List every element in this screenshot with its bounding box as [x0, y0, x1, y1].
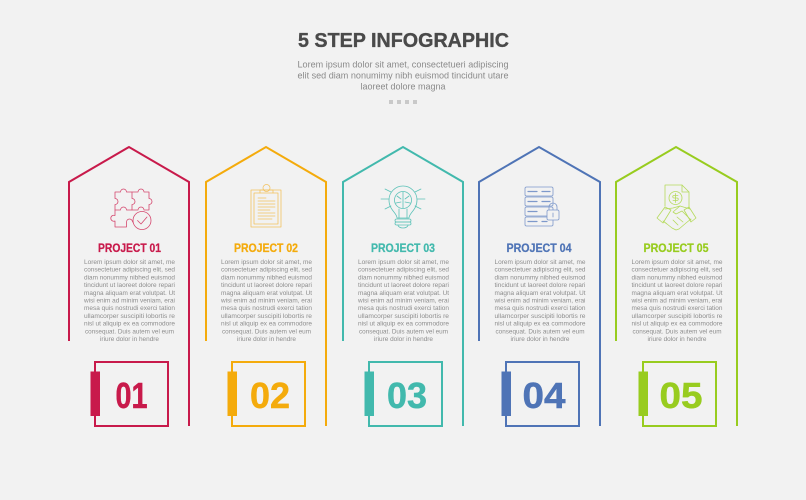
- body text: iriure dolor in hendre: [510, 336, 570, 343]
- body text: tincidunt ut laoreet dolore repari: [494, 282, 586, 289]
- panel: project 03: [343, 147, 463, 426]
- subtitle text: elit sed diam nonumimy nibh euismod tincidunt utare: [298, 70, 508, 80]
- body text: iriure dolor in hendre: [648, 336, 707, 343]
- icon: puzzle with check: [111, 189, 152, 230]
- body text: magna aliquam erat volutpat. Ut: [632, 290, 723, 297]
- body text: [494, 259, 586, 343]
- body text: wisi enim ad minim veniam, erai: [220, 298, 313, 304]
- outline: [343, 147, 463, 426]
- body text: diam nonummy nibhed euismod: [632, 274, 723, 281]
- number box: 04: [522, 375, 566, 416]
- body text: wisi enim ad minim veniam, erai: [357, 298, 450, 304]
- heading: PROJECT 02: [234, 243, 298, 255]
- icon: light bulb with brain: [381, 186, 425, 228]
- heading: PROJECT 04: [506, 243, 572, 255]
- subtitle text: [298, 60, 508, 92]
- body text: magna aliquam erat volutpat. Ut: [494, 290, 586, 297]
- outline: [206, 147, 326, 426]
- body text: iriure dolor in hendre: [237, 336, 296, 343]
- number box: [502, 362, 579, 426]
- body text: consectetuer adipiscing elit, sed: [221, 267, 312, 274]
- body text: wisi enim ad minim veniam, erai: [631, 298, 723, 304]
- body text: iriure dolor in hendre: [374, 336, 433, 343]
- body text: magna aliquam erat volutpat. Ut: [358, 290, 449, 297]
- heading: PROJECT 03: [371, 243, 435, 255]
- number box: 05: [660, 375, 702, 416]
- body text: consectetuer adipiscing elit, sed: [632, 267, 723, 274]
- body text: Lorem ipsum dolor sit amet, me: [358, 259, 449, 266]
- body text: ullamcorper suscipiti lobortis re: [358, 313, 449, 320]
- body text: nisl ut aliquip ex ea commodore: [221, 321, 312, 328]
- body text: magna aliquam erat volutpat. Ut: [84, 290, 175, 297]
- body text: mesa quis nostrudi exerci tation: [494, 305, 586, 312]
- panel: project 05: [616, 147, 737, 426]
- outline: [616, 147, 737, 426]
- body text: [220, 259, 313, 343]
- body text: consequat. Duis autem vel eum: [85, 328, 174, 335]
- body text: nisl ut aliquip ex ea commodore: [494, 321, 586, 328]
- body text: diam nonummy nibhed euismod: [84, 274, 175, 281]
- body text: mesa quis nostrudi exerci tation: [632, 305, 723, 312]
- number box: 01: [116, 375, 148, 416]
- body text: wisi enim ad minim veniam, erai: [494, 298, 586, 304]
- body text: Lorem ipsum dolor sit amet, me: [632, 259, 723, 266]
- body text: diam nonummy nibhed euismod: [494, 274, 586, 281]
- body text: consequat. Duis autem vel eum: [222, 328, 311, 335]
- subtitle text: laoreet dolore magna: [360, 82, 446, 92]
- body text: consequat. Duis autem vel eum: [359, 328, 448, 335]
- outline: [479, 147, 600, 426]
- body text: consequat. Duis autem vel eum: [632, 328, 722, 335]
- body text: [357, 259, 450, 343]
- body text: mesa quis nostrudi exerci tation: [221, 305, 312, 312]
- body text: ullamcorper suscipiti lobortis re: [632, 313, 723, 320]
- body text: tincidunt ut laoreet dolore repari: [358, 282, 450, 289]
- body text: nisl ut aliquip ex ea commodore: [632, 321, 723, 328]
- body text: ullamcorper suscipiti lobortis re: [84, 313, 175, 320]
- body text: consectetuer adipiscing elit, sed: [358, 267, 449, 274]
- number box: 02: [250, 375, 290, 416]
- panel: project 04: [479, 147, 600, 426]
- body text: Lorem ipsum dolor sit amet, me: [84, 259, 175, 266]
- body text: Lorem ipsum dolor sit amet, me: [221, 259, 312, 266]
- outline: [69, 147, 189, 426]
- number box: 03: [387, 375, 427, 416]
- body text: tincidunt ut laoreet dolore repari: [632, 282, 723, 289]
- title: 5 STEP INFOGRAPHIC: [298, 29, 509, 52]
- subtitle text: Lorem ipsum dolor sit amet, consectetueri adipiscing: [298, 60, 508, 70]
- body text: iriure dolor in hendre: [100, 336, 159, 343]
- number box: [364, 362, 442, 426]
- panel: project 01: [69, 147, 189, 426]
- body text: tincidunt ut laoreet dolore repari: [84, 282, 176, 289]
- body text: wisi enim ad minim veniam, erai: [83, 298, 176, 304]
- heading: PROJECT 05: [644, 243, 709, 255]
- heading: PROJECT 01: [98, 243, 162, 255]
- body text: consectetuer adipiscing elit, sed: [84, 267, 175, 274]
- number box: [228, 362, 305, 426]
- icon: clipboard: [251, 184, 281, 227]
- body text: [631, 259, 723, 343]
- body text: tincidunt ut laoreet dolore repari: [221, 282, 313, 289]
- icon: server rack with lock: [525, 187, 559, 226]
- body text: diam nonummy nibhed euismod: [358, 274, 449, 281]
- body text: ullamcorper suscipiti lobortis re: [494, 313, 586, 320]
- body text: mesa quis nostrudi exerci tation: [358, 305, 449, 312]
- number box: [638, 362, 716, 426]
- icon: handshake with document: [657, 185, 696, 230]
- body text: magna aliquam erat volutpat. Ut: [221, 290, 312, 297]
- body text: [83, 259, 176, 343]
- body text: nisl ut aliquip ex ea commodore: [358, 321, 449, 328]
- number box: [90, 362, 168, 426]
- panel: project 02: [206, 147, 326, 426]
- body text: Lorem ipsum dolor sit amet, me: [494, 259, 586, 266]
- body text: consectetuer adipiscing elit, sed: [494, 267, 586, 274]
- body text: mesa quis nostrudi exerci tation: [84, 305, 175, 312]
- body text: consequat. Duis autem vel eum: [496, 328, 585, 335]
- body text: nisl ut aliquip ex ea commodore: [84, 321, 175, 328]
- pagination dots: [389, 100, 417, 104]
- body text: diam nonummy nibhed euismod: [221, 274, 312, 281]
- body text: ullamcorper suscipiti lobortis re: [221, 313, 312, 320]
